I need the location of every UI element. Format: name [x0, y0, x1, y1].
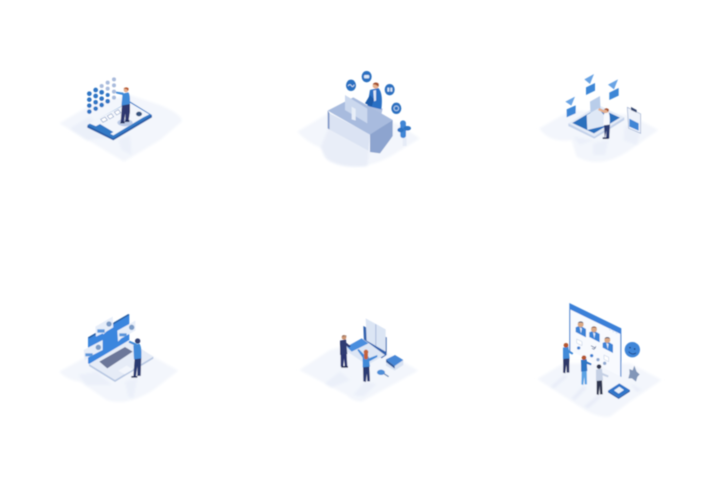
phone reflection: [70, 117, 132, 155]
paper planes and envelopes: [565, 74, 619, 117]
panel: person on phone rating stars: [59, 77, 182, 162]
phone: [87, 101, 152, 140]
chat bubbles: [84, 317, 135, 361]
person: [129, 338, 141, 378]
book on laptop: [363, 318, 387, 358]
floor shape: [537, 363, 662, 417]
icon: circle top left: [346, 80, 356, 91]
books stack: [386, 355, 403, 371]
icon: circle lower right: [391, 103, 401, 114]
floor shape: [297, 113, 420, 166]
floor reflections: [551, 374, 642, 408]
profile board window: [569, 303, 621, 377]
thumbs up tile: [608, 383, 630, 399]
smiley badge: [625, 342, 640, 357]
monitor: [345, 95, 367, 123]
floor shape: [299, 340, 418, 402]
floor reflection: [78, 372, 137, 398]
floor shape: [59, 355, 178, 402]
panel: man with laptop and chat bubbles: [59, 314, 178, 402]
person two: [581, 355, 592, 385]
woman: [357, 349, 377, 382]
floor reflections: [325, 372, 377, 397]
person: [598, 108, 610, 139]
profile cards: [576, 321, 613, 353]
floor reflections: [573, 125, 640, 155]
person: [116, 87, 133, 126]
star: [628, 366, 640, 382]
panel: man with tablet and envelopes: [539, 74, 658, 162]
clipboard: [627, 107, 641, 133]
star grid: [87, 77, 116, 114]
desk reflection: [321, 123, 369, 166]
laptop base: [345, 338, 385, 365]
panel: man at desk with service icons: [297, 71, 420, 166]
person one: [563, 343, 573, 373]
icon: circle top: [362, 71, 372, 82]
panel: two people with book and laptop: [299, 318, 418, 402]
icon: circle right: [385, 84, 395, 95]
magnifier: [377, 370, 389, 377]
man: [340, 335, 351, 368]
tablet: [568, 105, 624, 139]
panel: three people and profile board: [537, 303, 662, 417]
floor shape: [59, 95, 182, 162]
chair and man: [365, 82, 383, 117]
large envelope with letter: [587, 96, 604, 130]
floor shape: [539, 110, 658, 162]
desk: [328, 97, 393, 153]
small icons on board: [577, 339, 609, 365]
icon: plant: [397, 120, 411, 146]
laptop: [88, 314, 153, 382]
person three: [596, 364, 609, 395]
